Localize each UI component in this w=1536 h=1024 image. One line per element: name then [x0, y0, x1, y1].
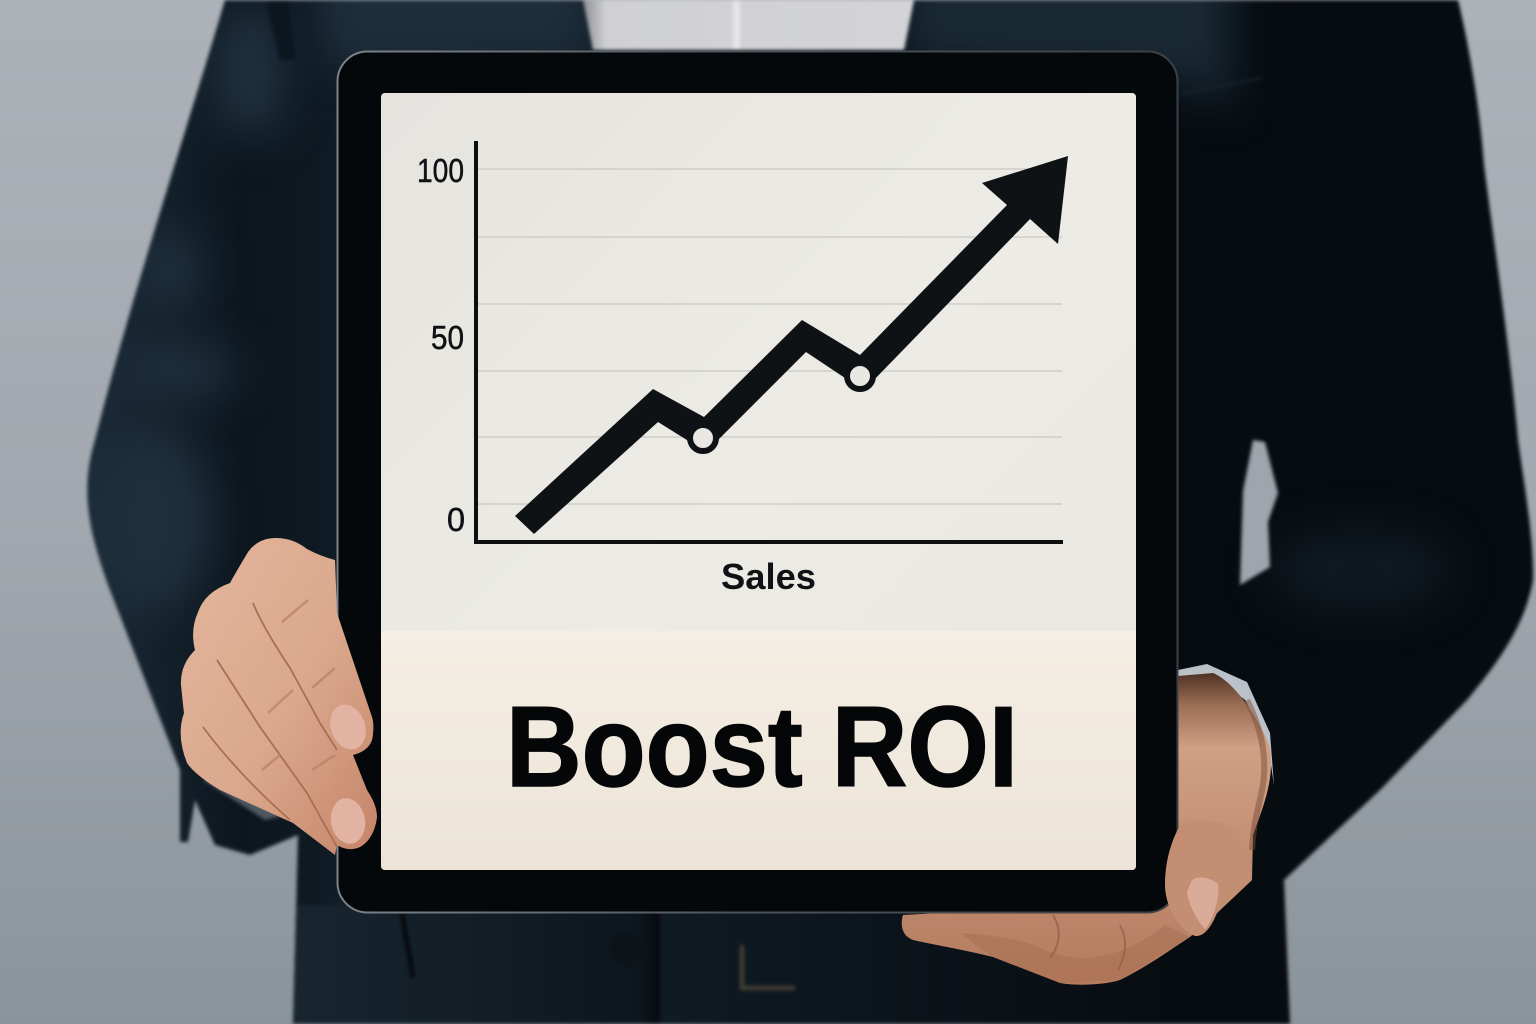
pocket seam	[1180, 78, 1262, 95]
jacket hem	[402, 913, 413, 977]
data point	[847, 363, 873, 389]
shirt	[583, 0, 914, 50]
right hand palm and fingers	[902, 673, 1271, 985]
grid lines	[478, 169, 1062, 504]
tablet	[338, 52, 1178, 912]
finger nail	[327, 795, 369, 847]
screen: chart area	[381, 93, 1136, 870]
trend line with arrow	[515, 156, 1068, 534]
button	[609, 933, 643, 967]
gap between arm and torso	[1240, 440, 1278, 585]
line chart	[417, 141, 1068, 597]
finger crease	[1050, 915, 1125, 970]
lower torso	[293, 905, 660, 1024]
thumb nail	[1187, 877, 1218, 929]
screen: title band	[381, 631, 1136, 870]
belt buckle	[742, 945, 795, 988]
finger division lines	[203, 603, 337, 847]
finger underside shadow	[960, 925, 1190, 983]
y axis labels: 50	[431, 319, 464, 356]
palm edge shadow	[1247, 700, 1264, 850]
title: Boost ROI	[506, 684, 1018, 811]
upper chest lighter cloth	[320, 0, 1230, 110]
tablet frame	[338, 52, 1178, 912]
right sleeve fold highlight	[1284, 532, 1436, 608]
left hand	[181, 538, 377, 855]
data point	[690, 425, 716, 451]
axes	[476, 141, 1063, 542]
left sleeve highlights	[118, 2, 298, 604]
left shirt cuff	[203, 775, 285, 820]
y axis labels: 100	[417, 152, 464, 189]
right shirt cuff	[1178, 664, 1274, 785]
knuckle creases	[262, 600, 335, 770]
y axis labels	[417, 152, 465, 538]
right thumb	[1165, 820, 1252, 936]
x axis label: Sales	[721, 556, 816, 597]
left lapel fold	[266, 0, 296, 60]
y axis labels: 0	[447, 501, 465, 538]
finger nail	[324, 700, 372, 754]
